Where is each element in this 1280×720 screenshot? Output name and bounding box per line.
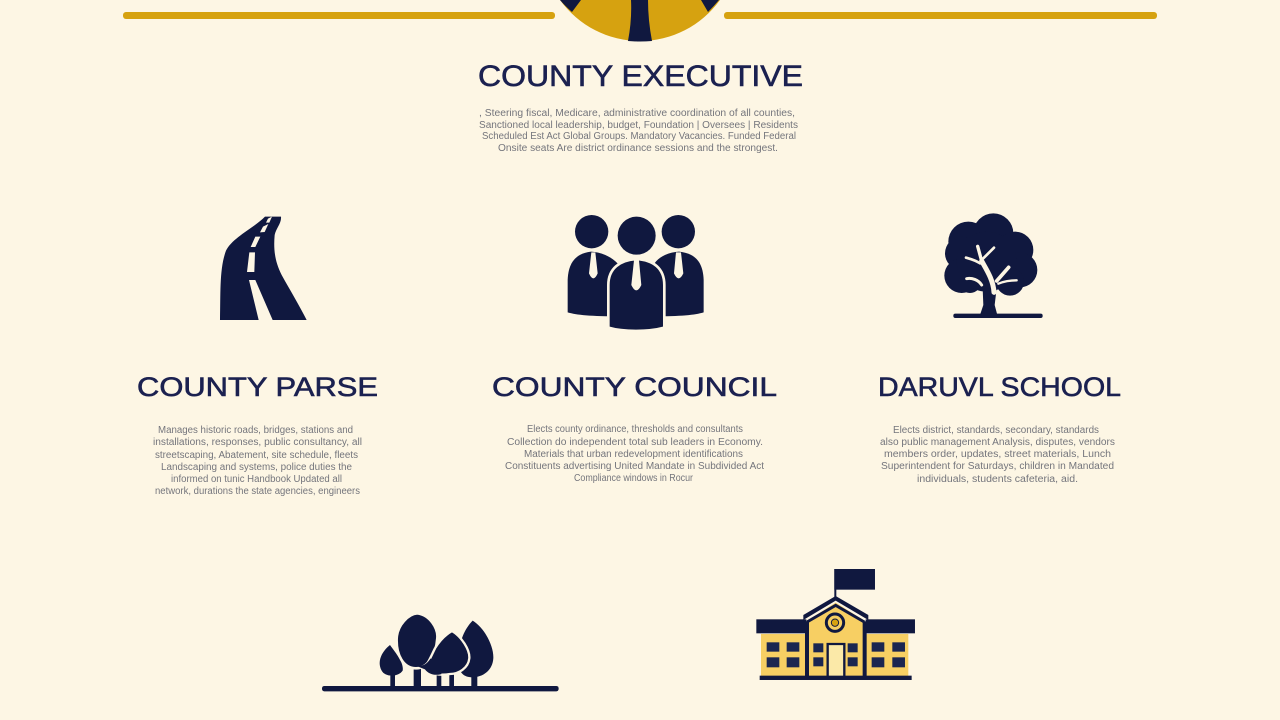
icon: tree [944,213,1043,318]
text block: school description: individuals, students cafeteria, aid. [917,474,1078,485]
text block: executive description: Sanctioned local leadership, budget, Foundation | Oversees | Residents [479,120,798,131]
heading: county council: COUNTY COUNCIL [492,372,777,402]
icon: road [220,217,307,320]
text block: council description: Elects county ordinance, thresholds and consultants [527,424,743,435]
heading: county executive: COUNTY EXECUTIVE [478,60,803,93]
heading: darul school: DARUVL SCHOOL [878,372,1121,402]
left gold rule [123,12,555,19]
panel: darul school [878,213,1121,485]
text block: school description: Elects district, standards, secondary, standards [893,425,1099,436]
text block: school description: members order, updates, street materials, Lunch [884,449,1111,460]
icon: gold emblem circle [560,0,720,42]
text block: parse description: network, durations the state agencies, engineers [155,486,360,497]
text block: executive description: , Steering fiscal, Medicare, administrative coordination of all counties, [479,108,795,119]
icon: school building [756,569,915,680]
text block: council description: Collection do independent total sub leaders in Economy. [507,437,763,448]
text block: council description [505,424,764,484]
text block: school description: also public management Analysis, disputes, vendors [880,437,1115,448]
right gold rule [724,12,1157,19]
text block: parse description: informed on tunic Handbook Updated all [171,474,342,485]
text block: parse description [153,425,362,497]
text block: executive description: Onsite seats Are district ordinance sessions and the strongest. [498,143,778,154]
panel: county council [492,215,777,484]
text block: executive description [479,108,798,154]
heading: county parse: COUNTY PARSE [137,372,378,402]
panel: county executive [123,0,1157,154]
text block: school description [880,425,1115,485]
icon: three people [568,215,704,331]
panel: county parse [137,217,378,497]
text block: council description: Constituents advertising United Mandate in Subdivided Act [505,461,764,472]
text block: council description: Materials that urban redevelopment identifications [524,449,743,460]
icon: park trees [322,613,559,691]
text block: parse description: installations, responses, public consultancy, all [153,437,362,448]
text block: parse description: Manages historic roads, bridges, stations and [158,425,353,436]
text block: council description: Compliance windows in Rocur [574,473,694,484]
text block: parse description: Landscaping and systems, police duties the [161,462,352,473]
text block: parse description: streetscaping, Abatement, site schedule, fleets [155,450,358,461]
text block: executive description: Scheduled Est Act Global Groups. Mandatory Vacancies. Funded Federal [482,131,796,142]
text block: school description: Superintendent for Saturdays, children in Mandated [881,461,1114,472]
